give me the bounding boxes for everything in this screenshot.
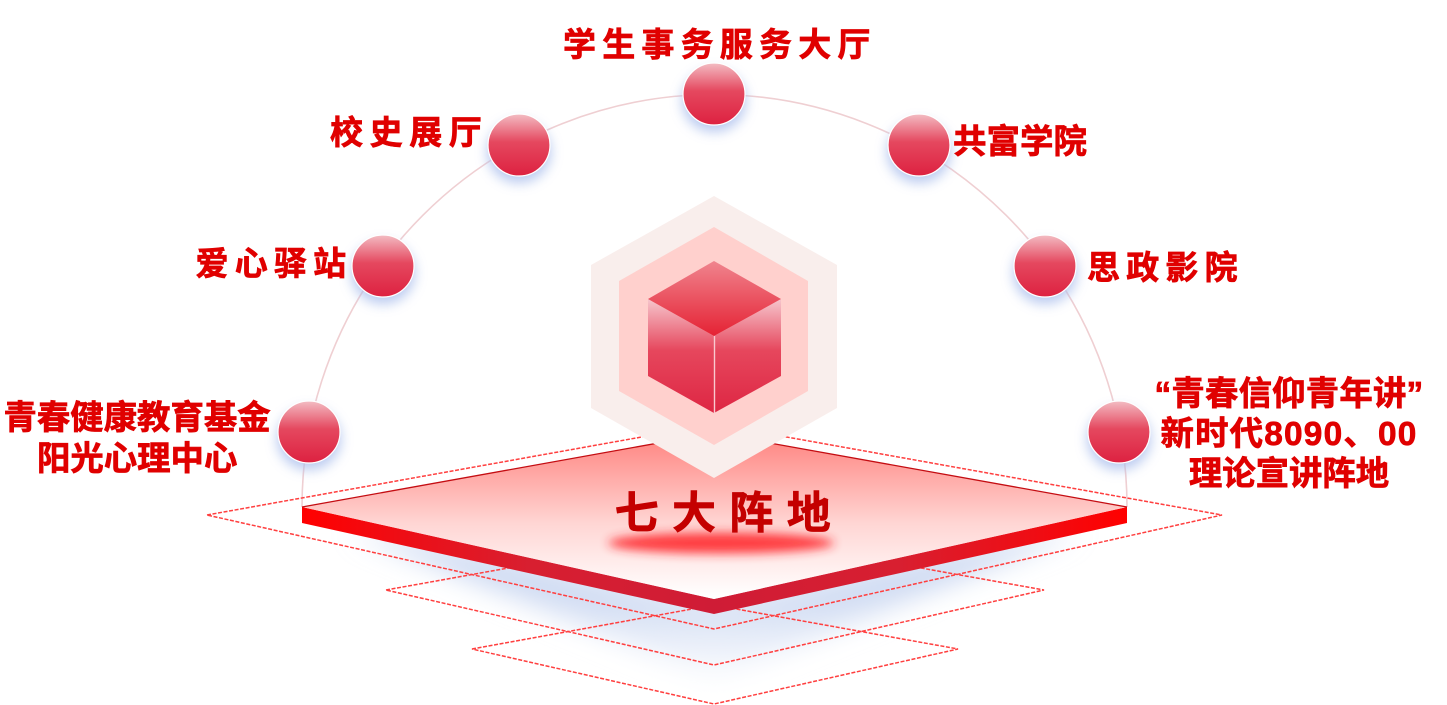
node ball — [1014, 235, 1076, 297]
label: 新时代8090、00 — [1161, 416, 1417, 453]
hexagon cube emblem — [591, 196, 837, 478]
node ball — [1088, 401, 1150, 463]
node ball — [683, 63, 745, 125]
platform — [302, 433, 1127, 614]
node ball — [278, 401, 340, 463]
label: 学生事务服务大厅 — [563, 26, 877, 63]
cube top face — [648, 261, 781, 336]
inner hexagon — [619, 227, 808, 445]
node: 共富学院 — [887, 114, 1087, 183]
cube — [648, 261, 781, 413]
connecting arc — [302, 95, 1127, 507]
dashed layer: middle — [386, 531, 1044, 665]
node ball — [888, 114, 950, 176]
platform top face — [302, 433, 1127, 599]
node: 学生事务服务大厅 — [563, 26, 877, 132]
node: 青春健康教育基金 阳光心理中心 — [4, 400, 341, 478]
node ball — [488, 114, 550, 176]
dashed layer: lowest — [472, 605, 958, 704]
label: 青春健康教育基金 — [4, 400, 271, 437]
dashed layer: top — [207, 424, 1222, 629]
label: 爱心驿站 — [196, 245, 352, 282]
outer hexagon — [591, 196, 837, 478]
label: “青春信仰青年讲” — [1155, 376, 1423, 413]
label: 思政影院 — [1087, 249, 1244, 286]
node shadow — [1087, 408, 1151, 470]
node shadow — [682, 70, 746, 132]
title shadow ellipse — [608, 532, 834, 554]
node ball — [352, 235, 414, 297]
platform left side — [302, 507, 714, 614]
cube left face — [648, 299, 714, 413]
label: 理论宣讲阵地 — [1189, 456, 1389, 493]
label: 校史展厅 — [330, 114, 488, 151]
platform blue shadow — [350, 530, 1080, 680]
cube right face — [714, 299, 781, 413]
node shadow — [887, 121, 951, 183]
node: 思政影院 — [1013, 235, 1244, 304]
platform back edge — [302, 433, 1127, 507]
node shadow — [1013, 242, 1077, 304]
label: 共富学院 — [953, 124, 1087, 161]
label: 阳光心理中心 — [37, 441, 237, 478]
title: 七大阵地 — [615, 489, 844, 538]
platform right side — [714, 507, 1127, 614]
node: 校史展厅 — [330, 114, 551, 183]
node shadow — [351, 242, 415, 304]
cube center edge — [714, 336, 716, 413]
node shadow — [277, 408, 341, 470]
node shadow — [487, 121, 551, 183]
node: 青春信仰青年讲 新时代8090、00 理论宣讲阵地 — [1087, 376, 1423, 493]
node: 爱心驿站 — [196, 235, 415, 304]
